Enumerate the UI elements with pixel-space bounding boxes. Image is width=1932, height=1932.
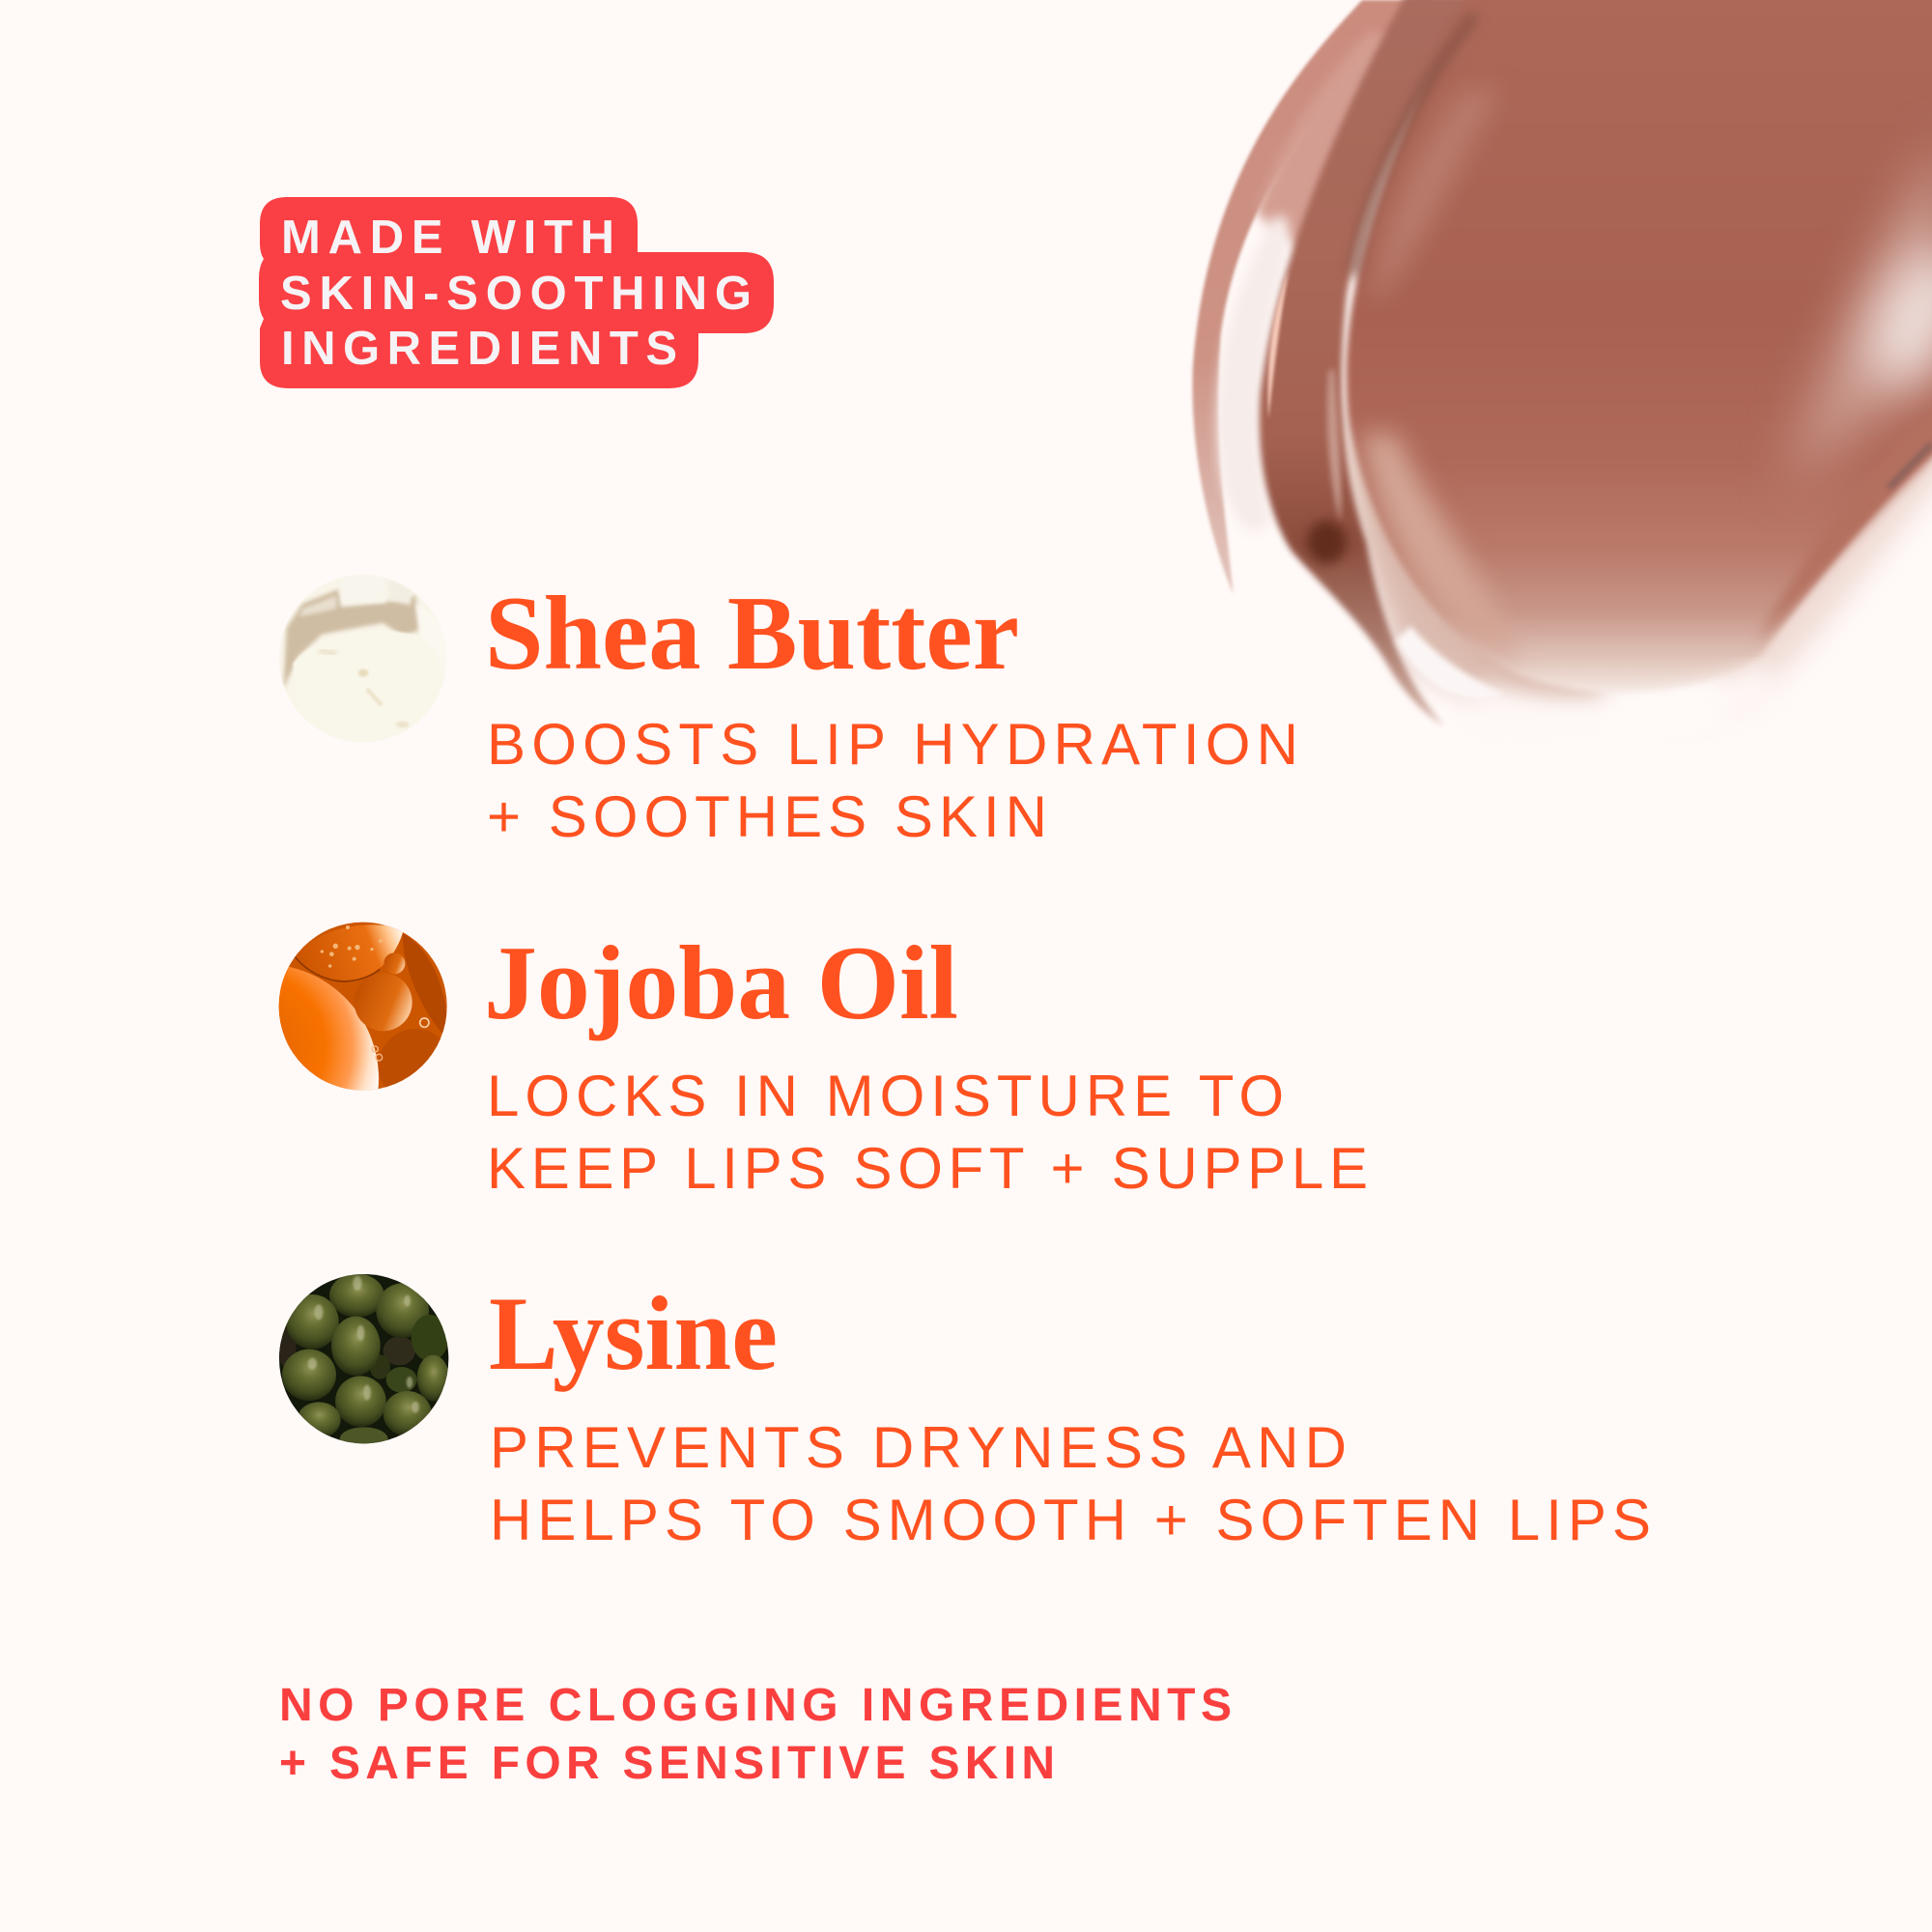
description: shea butter: + SOOTHES SKIN — [487, 784, 1047, 849]
footer claim — [279, 1680, 1232, 1789]
swatch outer rim — [1192, 0, 1435, 594]
description: jojoba oil — [487, 1064, 1368, 1201]
description: jojoba oil: LOCKS IN MOISTURE TO — [487, 1064, 1284, 1128]
icon: lysine — [278, 1274, 448, 1443]
badge: made with skin-soothing ingredients — [259, 197, 774, 388]
swatch pale underlayer — [1347, 404, 1603, 708]
ingredient: lysine — [278, 1274, 1648, 1540]
description: lysine: PREVENTS DRYNESS AND — [490, 1415, 1347, 1480]
badge background — [259, 197, 774, 388]
description: lysine — [490, 1415, 1651, 1552]
lip product swatch — [1192, 0, 1932, 725]
badge text — [280, 212, 752, 375]
swatch highlights — [1268, 271, 1289, 419]
swatch body — [1347, 0, 1932, 694]
ingredient: shea butter — [279, 575, 1294, 837]
icon: jojoba oil — [278, 922, 447, 1091]
heading: jojoba oil: Jojoba Oil — [484, 924, 958, 1041]
badge text: INGREDIENTS — [281, 323, 677, 375]
icon: shea butter — [279, 575, 446, 742]
badge text: MADE WITH — [281, 212, 614, 264]
swatch shaded band — [1260, 0, 1494, 725]
heading: lysine: Lysine — [489, 1275, 778, 1392]
heading: shea butter: Shea Butter — [485, 575, 1019, 692]
description: shea butter: BOOSTS LIP HYDRATION — [487, 712, 1298, 777]
swatch dark crease — [1307, 521, 1347, 564]
swatch soft bottom edge — [1475, 680, 1771, 719]
badge text: SKIN-SOOTHING — [280, 268, 752, 320]
description: lysine: HELPS TO SMOOTH + SOFTEN LIPS — [490, 1488, 1651, 1552]
footer claim: + SAFE FOR SENSITIVE SKIN — [279, 1738, 1055, 1789]
description: shea butter — [487, 712, 1298, 849]
description: jojoba oil: KEEP LIPS SOFT + SUPPLE — [487, 1136, 1368, 1201]
ingredient: jojoba oil — [278, 922, 1366, 1188]
footer claim: NO PORE CLOGGING INGREDIENTS — [279, 1680, 1232, 1731]
